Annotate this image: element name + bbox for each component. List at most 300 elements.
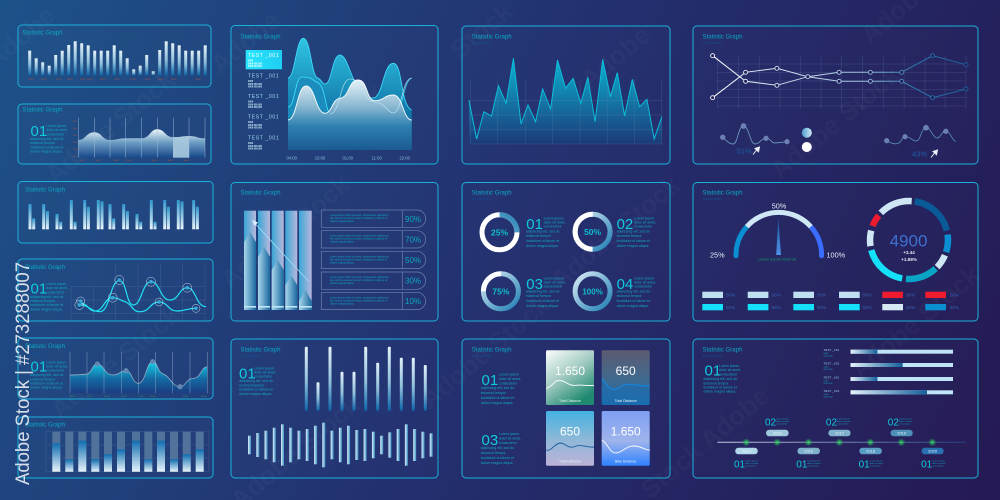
item 01: 01 xyxy=(526,216,543,233)
test bar 4 xyxy=(824,389,953,398)
description: dolore magna aliqua. xyxy=(239,392,272,396)
axis labels: 00:00 xyxy=(158,79,164,81)
card: 1.650 green: Total Distance xyxy=(559,399,581,403)
note 02: dolor sit amet, xyxy=(776,420,790,423)
heading: Statistic Graph xyxy=(472,346,512,353)
description: incididunt ut labore et xyxy=(704,385,737,389)
description: incididunt ut labore et xyxy=(30,145,63,149)
item 03 xyxy=(526,276,566,308)
number 01: 01 xyxy=(30,359,47,376)
item 01: dolore magna aliqua. xyxy=(481,401,513,405)
progress row 50%: 50% xyxy=(405,256,421,265)
list item: 0000 000,000 xyxy=(248,104,263,106)
item 04 xyxy=(617,276,656,308)
card: 650 blue xyxy=(546,411,594,466)
item 01: adipiscing elit, sed do xyxy=(481,386,514,390)
watermark pattern: Stock xyxy=(315,76,389,145)
item 03: dolore magna aliqua. xyxy=(481,461,513,465)
note 01 xyxy=(734,460,759,471)
list item: 0000 000,000 xyxy=(248,125,263,127)
axis labels xyxy=(28,79,201,81)
description: adipiscing elit, sed do xyxy=(704,377,737,381)
year pill 2020 xyxy=(922,448,944,454)
chevron bars xyxy=(244,211,312,310)
axis labels: 00:00 xyxy=(79,160,85,162)
ring 100% xyxy=(575,274,610,309)
description: consectetur xyxy=(719,373,738,377)
card: 650 slate: Total Distance xyxy=(615,399,637,403)
item 01: Lorem ipsum xyxy=(544,216,564,220)
item 01: dolor sit amet, xyxy=(499,377,521,381)
item 03: eiusmod tempor xyxy=(526,294,552,298)
description: eiusmod tempor xyxy=(704,381,729,385)
year pill 2019 xyxy=(890,430,913,436)
line chart xyxy=(711,54,968,109)
description: Lorem ipsum xyxy=(46,124,66,128)
note 02: dolor sit amet, xyxy=(837,420,851,423)
axis labels: 00:00 xyxy=(130,79,136,81)
panel: progress rings xyxy=(462,182,670,321)
legend: 50% xyxy=(906,293,915,298)
axis labels xyxy=(70,396,207,398)
legend: 50% xyxy=(772,293,781,298)
year pill 2018 xyxy=(859,448,882,454)
x axis labels: 15:00 xyxy=(315,156,326,160)
description: adipiscing elit, sed do xyxy=(30,137,64,141)
item 01: incididunt ut labore et xyxy=(526,239,559,243)
note 01 xyxy=(921,460,946,471)
progress row 10%: dolore magna aliqua. xyxy=(330,301,355,305)
panel: capsule bars xyxy=(231,339,438,478)
description: eiusmod tempor xyxy=(30,377,56,381)
description: dolore magna aliqua. xyxy=(30,386,63,390)
list item: 0000 xyxy=(248,81,254,83)
note 01: consectetur xyxy=(870,465,881,468)
panel: chevron bars and percentage list xyxy=(231,182,438,321)
list item xyxy=(248,136,279,150)
legend xyxy=(702,292,959,310)
description: adipiscing elit, sed do xyxy=(30,373,64,377)
legend: 50% xyxy=(817,293,826,298)
note 01: dolor sit amet, xyxy=(807,462,821,465)
legend: 50% xyxy=(726,305,735,310)
progress row 50%: Lorem ipsum dolor sit amet, consectetur adipiscing xyxy=(330,254,389,258)
description: dolor sit amet, xyxy=(46,364,68,368)
axis labels: 600 xyxy=(73,135,77,137)
item 04: dolore magna aliqua. xyxy=(617,304,649,308)
ring 75%: 75% xyxy=(492,287,510,297)
item 04: incididunt ut labore et xyxy=(617,299,650,303)
axis labels: 00:00 xyxy=(152,160,158,162)
highlighted list item: TEST _001 xyxy=(248,53,279,59)
card: 1.650 violet: 1.650 xyxy=(611,425,641,439)
progress row 30%: Lorem ipsum dolor sit amet, consectetur adipiscing xyxy=(330,275,389,279)
legend dots: Lorem ipsum dolor sit xyxy=(815,131,844,135)
list item: TEST _001 xyxy=(248,94,279,100)
axis labels: 00:00 xyxy=(195,79,201,81)
description: Lorem ipsum xyxy=(46,282,66,286)
item 02: dolore magna aliqua. xyxy=(617,244,649,248)
subheading: All mentions xyxy=(25,194,45,198)
item 01: dolor sit amet, xyxy=(544,220,566,224)
description: eiusmod tempor xyxy=(239,383,265,387)
list item xyxy=(248,74,279,88)
axis labels: 00:00 xyxy=(87,79,93,81)
progress row 70%: dolore magna aliqua. xyxy=(330,240,355,244)
panel: paired bars xyxy=(18,182,213,243)
x axis labels: 11:00 xyxy=(372,156,382,160)
item 01: consectetur xyxy=(499,382,518,386)
layered area chart xyxy=(288,38,412,150)
list item: 0000 000,000 xyxy=(248,86,263,88)
item 02: adipiscing elit, sed do xyxy=(617,230,650,234)
progress row 10%: 10% xyxy=(405,297,421,306)
area chart xyxy=(70,352,207,393)
heading: Statistic Graph xyxy=(472,189,512,196)
subheading: All mentions xyxy=(22,38,42,42)
axis labels: 00:00 xyxy=(67,79,73,81)
progress row 10% xyxy=(321,292,426,310)
note 02: dolor sit amet, xyxy=(899,420,913,423)
test bar 1: 0000 000 xyxy=(824,356,833,358)
progress row 30%: dolore magna aliqua. xyxy=(330,281,355,285)
note 01: Lorem ipsum xyxy=(932,460,945,462)
progress row 90%: elit, sed do eiusmod tempor incididunt ut labore et xyxy=(330,216,388,220)
note 01: consectetur xyxy=(807,465,819,468)
item 02 xyxy=(617,216,656,248)
progress row 70% xyxy=(321,231,426,248)
legend: 50% xyxy=(862,305,872,310)
item 03: dolor sit amet, xyxy=(544,280,566,284)
description: dolor sit amet, xyxy=(46,286,68,290)
subheading: All mentions xyxy=(240,41,260,45)
year pill 2015: 2015 xyxy=(773,430,783,436)
item 03: adipiscing elit, sed do xyxy=(481,446,514,450)
watermark pattern: Adobe xyxy=(575,20,656,95)
axis labels: 00:00 xyxy=(113,160,119,162)
progress row 30% xyxy=(321,272,426,289)
watermark pattern: Adobe Stock xyxy=(415,289,556,415)
ring 25%: 25% xyxy=(491,228,508,238)
test bar 2: 0000 000 xyxy=(824,369,833,371)
x axis labels xyxy=(286,156,411,160)
subheading: All mentions xyxy=(472,197,491,201)
note 01: 01 xyxy=(734,460,746,471)
item 03: adipiscing elit, sed do xyxy=(526,290,560,294)
item 03 xyxy=(481,432,521,465)
list item: 0000 xyxy=(248,122,254,124)
heading: Statistic Graph xyxy=(240,346,280,353)
year pill 2017 xyxy=(828,430,851,436)
test bar 3: 0000 000 xyxy=(824,383,833,385)
progress row 50%: dolore magna aliqua. xyxy=(330,260,355,264)
item 01 xyxy=(481,372,521,405)
card: 1.650 violet xyxy=(602,411,650,466)
legend: 50% xyxy=(817,305,826,310)
gauge: 25% xyxy=(710,250,725,260)
test bar 1 xyxy=(824,348,953,358)
watermark pattern: Adobe xyxy=(205,5,286,80)
axis labels: 00:00 xyxy=(145,79,151,81)
item 03: Lorem ipsum xyxy=(499,432,519,436)
progress row 90%: 90% xyxy=(405,215,421,224)
year pill 2020: 2020 xyxy=(928,448,938,454)
card: 1.650 violet: Bike Distance xyxy=(615,460,636,464)
ring 50%: 50% xyxy=(584,227,602,237)
heading: Statistic Graph xyxy=(702,33,742,40)
subheading: All mentions xyxy=(240,354,260,358)
card: 650 slate: 650 xyxy=(616,364,636,378)
timeline xyxy=(717,418,966,471)
progress row 90%: Lorem ipsum dolor sit amet, consectetur adipiscing xyxy=(330,213,389,217)
year pill 2016: 2016 xyxy=(804,448,814,454)
item 03: incididunt ut labore et xyxy=(481,456,514,460)
progress row 90% xyxy=(321,210,426,227)
item 03: consectetur xyxy=(499,441,518,445)
number 01: 01 xyxy=(704,363,721,380)
watermark pattern: Adobe Stock xyxy=(215,169,356,295)
progress row 70%: Lorem ipsum dolor sit amet, consectetur adipiscing xyxy=(330,234,389,238)
description: Lorem ipsum xyxy=(254,366,274,370)
item 02: dolor sit amet, xyxy=(634,220,656,224)
progress row 10%: elit, sed do eiusmod tempor incididunt ut labore et xyxy=(330,298,388,302)
number 01: 01 xyxy=(239,365,256,382)
donut chart: +1.88% xyxy=(901,257,917,262)
axis labels: 00:00 xyxy=(95,160,101,162)
item 02: incididunt ut labore et xyxy=(617,239,650,243)
item 03: consectetur xyxy=(544,284,563,288)
heading: Statistic Graph xyxy=(240,190,280,196)
year pill 2014: 2014 xyxy=(742,448,752,454)
heading: Statistic Graph xyxy=(702,346,742,353)
heading: Statistic Graph xyxy=(22,106,62,114)
axis labels: 00:00 xyxy=(70,396,76,398)
card: 650 slate xyxy=(602,350,650,405)
list item: TEST _001 xyxy=(248,136,279,142)
item 01: eiusmod tempor xyxy=(526,234,552,238)
watermark pattern: Adobe Stock xyxy=(40,64,181,190)
item 04: Lorem ipsum xyxy=(634,276,654,280)
list item: 0000 000,000 xyxy=(248,148,263,150)
progress row 10%: Lorem ipsum dolor sit amet, consectetur adipiscing xyxy=(330,295,389,299)
description: incididunt ut labore et xyxy=(30,303,63,307)
axis labels: 00:00 xyxy=(184,160,190,162)
axis labels: 00:00 xyxy=(126,160,132,162)
test bar 3: TEST _001 xyxy=(824,375,840,379)
description: incididunt ut labore et xyxy=(30,381,63,385)
list item: TEST _001 xyxy=(248,74,279,80)
test bar 2 xyxy=(824,361,953,371)
heading: Statistic Graph xyxy=(25,343,65,350)
description: consectetur xyxy=(46,132,65,136)
gauge: 100% xyxy=(826,250,846,260)
card: 650 blue: 650 xyxy=(560,425,580,439)
note 01 xyxy=(859,460,884,471)
item 03: dolore magna aliqua. xyxy=(526,304,559,308)
subheading: All mentions xyxy=(702,197,722,201)
item 03: 03 xyxy=(482,432,498,449)
bars xyxy=(28,41,207,75)
progress row 50% xyxy=(321,251,426,269)
subheading: All mentions xyxy=(702,41,722,45)
item 02: Lorem ipsum xyxy=(634,216,654,220)
subheading: All mentions xyxy=(22,114,42,118)
legend dots: Lorem ipsum dolor sit xyxy=(815,145,844,149)
subheading: All mentions xyxy=(472,354,491,358)
legend: 50% xyxy=(950,305,959,310)
item 03: Lorem ipsum xyxy=(544,276,564,280)
note 02: consectetur xyxy=(899,423,911,426)
description: dolor sit amet, xyxy=(719,368,741,372)
list item: 0000 000,000 xyxy=(248,128,263,130)
progress row 90%: dolore magna aliqua. xyxy=(330,219,355,223)
heading: Statistic Graph xyxy=(25,186,65,194)
description xyxy=(30,360,68,390)
axis labels xyxy=(73,121,190,162)
area chart xyxy=(469,58,662,144)
heading: Statistic Graph xyxy=(472,33,512,40)
note 01: consectetur xyxy=(932,465,944,468)
note 01: Lorem ipsum xyxy=(807,460,820,462)
ring 75% xyxy=(483,274,518,309)
axis labels: 00:00 xyxy=(104,396,110,398)
note 02 xyxy=(826,418,851,429)
sparkline 43%: 43% xyxy=(912,150,927,159)
note 01: dolor sit amet, xyxy=(870,462,884,465)
note 02: Lorem ipsum xyxy=(899,418,912,420)
list item: TEST _001 xyxy=(248,114,279,120)
donut chart xyxy=(870,201,948,279)
subheading: All mentions xyxy=(240,198,260,202)
description: eiusmod tempor xyxy=(30,141,56,145)
sparkline 51% xyxy=(720,123,789,155)
item 03: dolor sit amet, xyxy=(499,436,521,440)
test bar 4: 0000 000 xyxy=(824,396,833,398)
heading: Statistic Graph xyxy=(240,34,280,40)
highlighted list item xyxy=(246,50,282,69)
legend: 50% xyxy=(862,293,872,298)
item 01: incididunt ut labore et xyxy=(481,396,514,400)
card: 650 blue: Total Distance xyxy=(559,460,581,464)
tall bars xyxy=(305,347,427,411)
panel: stacked bars xyxy=(18,417,213,478)
watermark pattern: Adobe Stock xyxy=(765,59,906,185)
note 01 xyxy=(796,460,821,471)
progress row 70%: elit, sed do eiusmod tempor incididunt ut labore et xyxy=(330,237,388,241)
item 01: dolore magna aliqua. xyxy=(526,244,559,248)
description: dolore magna aliqua. xyxy=(704,389,736,393)
axis labels: 00:00 xyxy=(41,79,47,81)
description: dolor sit amet, xyxy=(46,128,68,132)
watermark pattern: Adobe Stock xyxy=(45,299,186,425)
note 01: 01 xyxy=(796,460,808,471)
sparkline 51%: 51% xyxy=(737,146,752,155)
panel: column bar chart top left xyxy=(18,25,211,87)
note 01: consectetur xyxy=(745,465,757,468)
note 01: dolor sit amet, xyxy=(932,462,946,465)
item 01 xyxy=(526,216,566,248)
centered bars xyxy=(248,423,433,467)
item 01: Lorem ipsum xyxy=(499,372,519,376)
stacked bars: track xyxy=(52,432,204,472)
number 01: 01 xyxy=(30,123,47,140)
subheading: All mentions xyxy=(25,272,45,276)
description: consectetur xyxy=(254,374,273,378)
description: Lorem ipsum xyxy=(46,360,66,364)
axis labels: 400 xyxy=(73,142,77,144)
test bar 4: 0000 xyxy=(824,394,829,396)
axis labels: 00:00 xyxy=(183,396,189,398)
highlighted list item: 0000 000,000 xyxy=(248,64,263,66)
progress row 70%: 70% xyxy=(405,236,421,245)
description: adipiscing elit, sed do xyxy=(239,379,273,383)
note 02: 02 xyxy=(826,418,837,429)
gauge: Lorem ipsum dolor sit xyxy=(758,256,797,262)
note 01: Lorem ipsum xyxy=(745,460,758,462)
item 01: 01 xyxy=(482,372,498,389)
description: eiusmod tempor xyxy=(30,299,56,303)
panel: spiky area chart xyxy=(462,26,670,164)
axis labels: 900 xyxy=(73,121,77,123)
item 04: adipiscing elit, sed do xyxy=(617,290,650,294)
year pill 2014 xyxy=(735,448,758,454)
axis labels: 00:00 xyxy=(87,396,93,398)
list item: 0000 xyxy=(248,102,254,104)
panel: progress bars and timeline xyxy=(693,339,978,478)
sparkline 43% xyxy=(884,125,956,159)
gauge xyxy=(710,202,846,262)
description xyxy=(30,282,68,312)
watermark pattern: Adobe Stock xyxy=(545,169,686,295)
x axis labels: 01:00 xyxy=(342,156,354,160)
list item xyxy=(248,114,279,130)
description xyxy=(704,364,741,393)
note 02 xyxy=(888,418,913,429)
test bar 3: 0000 xyxy=(824,380,829,382)
note 02: Lorem ipsum xyxy=(776,418,789,420)
heading: Statistic Graph xyxy=(25,422,65,428)
description xyxy=(239,366,276,396)
item 04: eiusmod tempor xyxy=(617,294,643,298)
item 04: dolor sit amet, xyxy=(634,280,656,284)
ring 50% xyxy=(575,214,610,249)
panel: cyan area chart xyxy=(18,338,213,399)
axis labels: 00:00 xyxy=(168,160,174,162)
subheading: All mentions xyxy=(25,351,45,355)
list item: 0000 000,000 xyxy=(248,146,263,148)
heading: Statistic Graph xyxy=(702,189,742,196)
item 01: consectetur xyxy=(544,224,563,228)
test bar 1: 0000 xyxy=(824,353,829,355)
description: adipiscing elit, sed do xyxy=(30,295,64,299)
note 02: consectetur xyxy=(776,423,788,426)
area chart xyxy=(78,118,205,158)
item 04: 04 xyxy=(617,276,633,293)
axis labels: 00:00 xyxy=(201,396,207,398)
paired bars xyxy=(28,200,199,229)
arrow xyxy=(252,220,308,281)
legend: 50% xyxy=(950,293,959,298)
description: dolor sit amet, xyxy=(254,370,276,374)
axis labels: 00:00 xyxy=(114,79,120,81)
axis labels: 00:00 xyxy=(121,396,127,398)
donut chart: 4900 xyxy=(890,232,927,251)
list item: 0000 000,000 xyxy=(248,84,263,86)
progress row 30%: 30% xyxy=(405,276,421,286)
legend: 50% xyxy=(906,305,915,310)
year pill 2019: 2019 xyxy=(897,430,907,436)
panel: dual line chart with markers xyxy=(18,259,213,321)
